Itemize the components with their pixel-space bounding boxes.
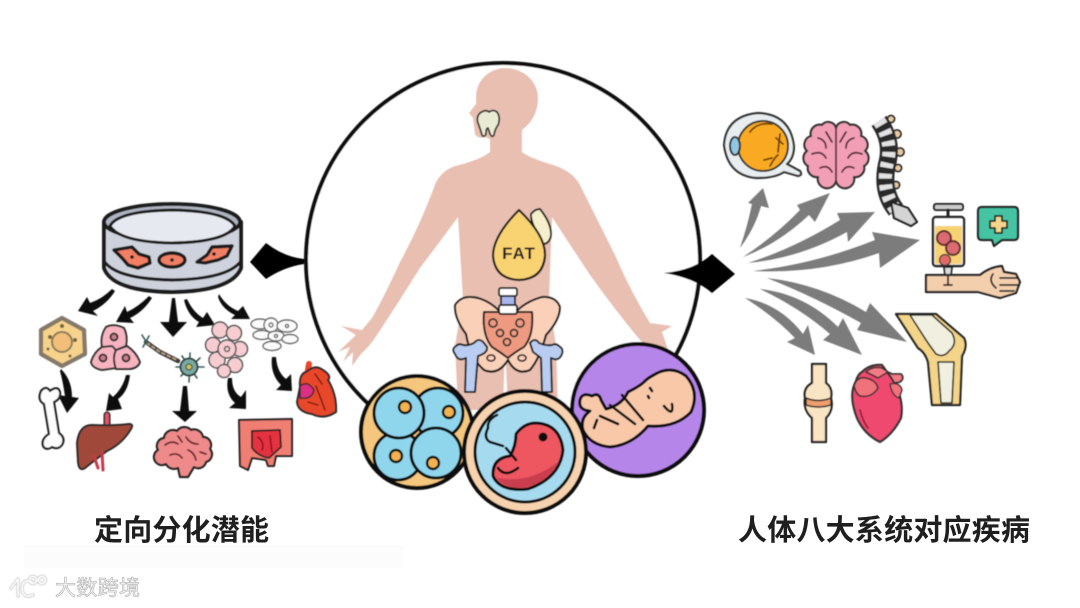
arrows: dish to differentiated cells	[58, 289, 292, 422]
label: FAT: FAT	[502, 244, 536, 263]
icon: tooth	[477, 110, 499, 136]
watermark text: 大数跨境	[55, 577, 140, 600]
icon: liver	[77, 415, 132, 470]
icon: knee cross-section	[896, 314, 966, 405]
human body silhouette	[338, 68, 672, 410]
heading: left: 定向分化潜能	[94, 514, 269, 547]
icon: eye	[724, 113, 801, 178]
arrow: black arrow to diseases	[664, 254, 735, 293]
cells in dish	[114, 246, 232, 268]
arrows: gray fan arrows	[740, 188, 920, 355]
icon: FAT droplets	[493, 209, 551, 280]
icon: brain top view	[803, 122, 869, 188]
icon: arm	[926, 266, 1020, 298]
icon: intestine	[239, 419, 292, 470]
large circle ring	[306, 63, 700, 457]
icon: watermark logo	[11, 576, 46, 596]
icon: pelvis with spine and femurs	[453, 288, 563, 392]
cell: hexagonal tan cell	[41, 318, 85, 366]
icon: spine	[879, 116, 917, 226]
icon: finger joint	[805, 364, 832, 442]
cell: neuron	[142, 335, 204, 382]
icon: bone	[40, 388, 63, 449]
cell: sketched cell group	[251, 318, 298, 350]
circle: embryo	[464, 391, 586, 513]
icon: heart (left)	[297, 364, 336, 417]
cell: pink cell trio	[91, 325, 140, 370]
circle: fetus	[572, 344, 704, 476]
icon: petri dish	[104, 204, 241, 292]
icon: brain (left)	[154, 427, 212, 477]
icon: heart (right)	[852, 365, 903, 442]
icon: IV jar	[933, 204, 964, 275]
circle: four-cell embryo	[361, 376, 473, 488]
arrow: black arrow to petri dish	[250, 243, 304, 279]
cell: cell cluster	[206, 322, 248, 378]
heading: right: 人体八大系统对应疾病	[738, 514, 1030, 547]
icon: medical chat bubble	[978, 207, 1018, 246]
